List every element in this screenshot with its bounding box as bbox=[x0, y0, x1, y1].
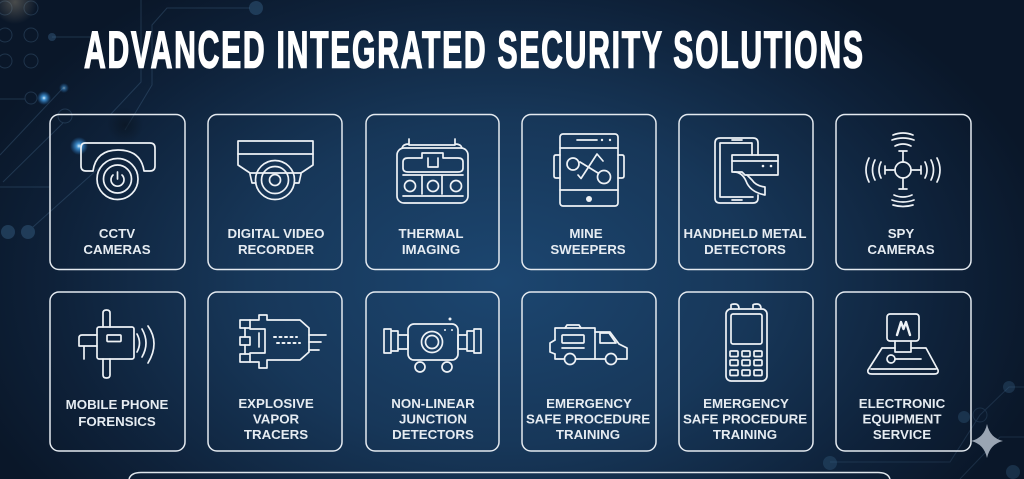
label: emergency safe procedure training, radio: SAFE PROCEDURE bbox=[683, 412, 807, 426]
title: ADVANCED INTEGRATED SECURITY SOLUTIONS bbox=[84, 22, 863, 80]
label: handheld metal detectors: DETECTORS bbox=[704, 242, 786, 257]
label: digital video recorder: DIGITAL VIDEO bbox=[227, 226, 325, 241]
label: emergency safe procedure training, van: TRAINING bbox=[556, 427, 620, 442]
label: spy cameras: CAMERAS bbox=[867, 242, 935, 257]
panel: CCTV cameras bbox=[50, 114, 185, 270]
icon: tablet with route bbox=[554, 134, 624, 206]
label: non-linear junction detectors: DETECTORS bbox=[392, 427, 474, 442]
icon: dome camera bbox=[238, 141, 313, 200]
label: spy cameras: SPY bbox=[888, 226, 914, 241]
icon: phone and detector bbox=[715, 138, 778, 203]
icon: equipment station bbox=[868, 314, 938, 374]
label: digital video recorder: RECORDER bbox=[238, 242, 314, 257]
label: CCTV cameras: CAMERAS bbox=[83, 242, 151, 257]
panel: mobile phone forensics bbox=[50, 292, 185, 451]
icon: CCTV camera bbox=[81, 143, 155, 200]
panel: handheld metal detectors bbox=[679, 114, 813, 270]
label: emergency safe procedure training, van: EMERGENCY bbox=[546, 396, 632, 411]
icon: signal device bbox=[79, 310, 154, 378]
label: non-linear junction detectors: JUNCTION bbox=[399, 412, 467, 426]
panel: mine sweepers bbox=[522, 114, 656, 270]
panel: thermal imaging bbox=[366, 114, 499, 270]
panel: emergency safe procedure training, van bbox=[522, 292, 656, 451]
label: thermal imaging: THERMAL bbox=[398, 226, 464, 241]
panel: non-linear junction detectors bbox=[366, 292, 499, 451]
bottom panel bbox=[129, 472, 890, 479]
icon: vapor tracer bbox=[240, 315, 326, 368]
icon: handheld radio bbox=[726, 304, 767, 381]
label: electronic equipment service: SERVICE bbox=[873, 427, 931, 442]
label: CCTV cameras: CCTV bbox=[99, 226, 135, 241]
label: emergency safe procedure training, radio: TRAINING bbox=[713, 427, 777, 442]
icon: sparkle bbox=[971, 424, 1003, 458]
label: explosive vapor tracers: TRACERS bbox=[244, 427, 308, 442]
label: handheld metal detectors: HANDHELD METAL bbox=[683, 226, 807, 241]
icon: junction detector bbox=[384, 318, 481, 372]
circuit pattern: left bbox=[0, 0, 250, 227]
label: mine sweepers: MINE bbox=[569, 226, 603, 241]
panel: emergency safe procedure training, radio bbox=[679, 292, 813, 451]
label: emergency safe procedure training, van: SAFE PROCEDURE bbox=[526, 412, 650, 426]
label: mobile phone forensics: MOBILE PHONE bbox=[66, 397, 168, 412]
label: non-linear junction detectors: NON-LINEAR bbox=[391, 396, 475, 411]
panel: explosive vapor tracers bbox=[208, 292, 342, 451]
panel: spy cameras bbox=[836, 114, 971, 270]
label: mobile phone forensics: FORENSICS bbox=[78, 414, 156, 429]
panel: digital video recorder bbox=[208, 114, 342, 270]
label: thermal imaging: IMAGING bbox=[402, 242, 460, 257]
label: mine sweepers: SWEEPERS bbox=[550, 242, 626, 257]
label: electronic equipment service: ELECTRONIC bbox=[859, 396, 946, 411]
icon: signal cross bbox=[866, 133, 940, 206]
circuit pattern: right bbox=[830, 387, 1024, 479]
label: emergency safe procedure training, radio: EMERGENCY bbox=[703, 396, 789, 411]
panel: electronic equipment service bbox=[836, 292, 971, 451]
glow dots bbox=[0, 0, 143, 155]
label: explosive vapor tracers: VAPOR bbox=[253, 412, 300, 426]
label: electronic equipment service: EQUIPMENT bbox=[862, 412, 942, 426]
label: explosive vapor tracers: EXPLOSIVE bbox=[238, 396, 314, 411]
icon: thermal imager bbox=[397, 139, 468, 203]
icon: van bbox=[550, 325, 627, 364]
